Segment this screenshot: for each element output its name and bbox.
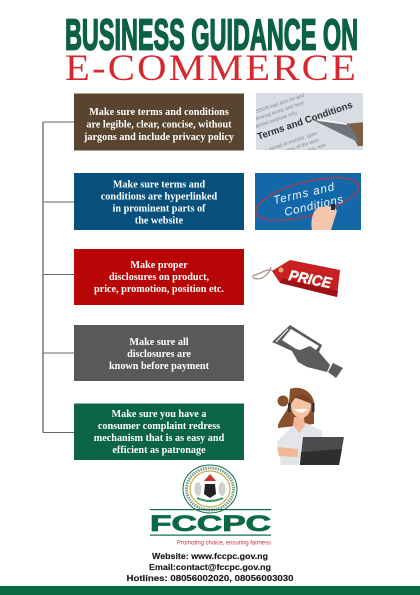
icon: terms and conditions document with pen: on the following terms and here [237, 100, 305, 129]
logo: FCCPC [150, 465, 271, 546]
panel: hyperlinked terms: Make sure terms and [113, 180, 206, 190]
icon: terms and conditions document with pen [256, 93, 363, 150]
title: E-COMMERCE [65, 48, 358, 89]
contact details [126, 551, 294, 583]
panel: proper disclosures: Make proper [130, 260, 188, 271]
logo: FCCPC: Promoting choice, ensuring fairness [177, 540, 271, 546]
panel: proper disclosures [74, 249, 244, 305]
logo: FCCPC: FCCPC [150, 511, 271, 536]
panel: hyperlinked terms [74, 173, 244, 230]
icon: terms and conditions document with pen: Month of the said date [273, 151, 322, 173]
panel: complaint redress: efficient as patronage [112, 445, 206, 456]
panel: legible terms [74, 94, 244, 150]
title [65, 10, 358, 89]
icon: terms and conditions document with pen: upon completion of the term [259, 137, 320, 163]
panel: proper disclosures: price, promotion, position etc. [94, 284, 224, 295]
emblem [183, 465, 237, 513]
icon: support agent with laptop [277, 388, 344, 465]
panel: proper disclosures: disclosures on product, [109, 272, 210, 283]
icon: price tag [253, 260, 340, 297]
panel: complaint redress: consumer complaint redress [98, 421, 220, 432]
panel: hyperlinked terms: conditions are hyperlinked [101, 192, 218, 202]
panel: disclosures before payment: disclosures are [127, 349, 191, 360]
panel: disclosures before payment [74, 325, 244, 381]
contact details: Website: www.fccpc.gov.ng [152, 551, 268, 561]
icon: terms and conditions document with pen: initial purpose be monthly rent [262, 142, 327, 170]
icon: hand holding banknotes [272, 325, 343, 378]
panel: complaint redress [74, 404, 244, 460]
panel: complaint redress: mechanism that is as easy and [94, 433, 225, 444]
icon: terms and conditions document with pen: Terms and Conditions [256, 100, 354, 143]
connector bracket [42, 122, 44, 432]
icon: terms and conditions document with pen: for the LESSOR has also be and [235, 93, 305, 122]
panel: legible terms: are legible, clear, concise, without [86, 120, 232, 130]
panel: hyperlinked terms: the website [135, 216, 184, 226]
icon: terms and conditions document with pen: for a period of months, upon [257, 130, 318, 157]
panel: legible terms: Make sure terms and conditions [89, 107, 229, 118]
icon: hand writing terms and conditions: Conditions [283, 194, 345, 219]
contact details: Email:contact@fccpc.gov.ng [149, 562, 271, 572]
footer bar [0, 586, 420, 595]
icon: hand writing terms and conditions [255, 173, 361, 230]
panel: complaint redress: Make sure you have a [112, 409, 206, 420]
panel: hyperlinked terms: in prominent parts of [113, 204, 206, 214]
panel: disclosures before payment: known before payment [109, 361, 210, 372]
panel: disclosures before payment: Make sure all [129, 337, 189, 348]
icon: price tag: PRICE [287, 267, 334, 292]
contact details: Hotlines: 08056002020, 08056003030 [126, 573, 294, 583]
panel: legible terms: jargons and include privacy policy [83, 132, 234, 143]
icon: terms and conditions document with pen: for residential purpose only [239, 110, 298, 135]
icon: hand writing terms and conditions: Terms and [272, 181, 336, 207]
